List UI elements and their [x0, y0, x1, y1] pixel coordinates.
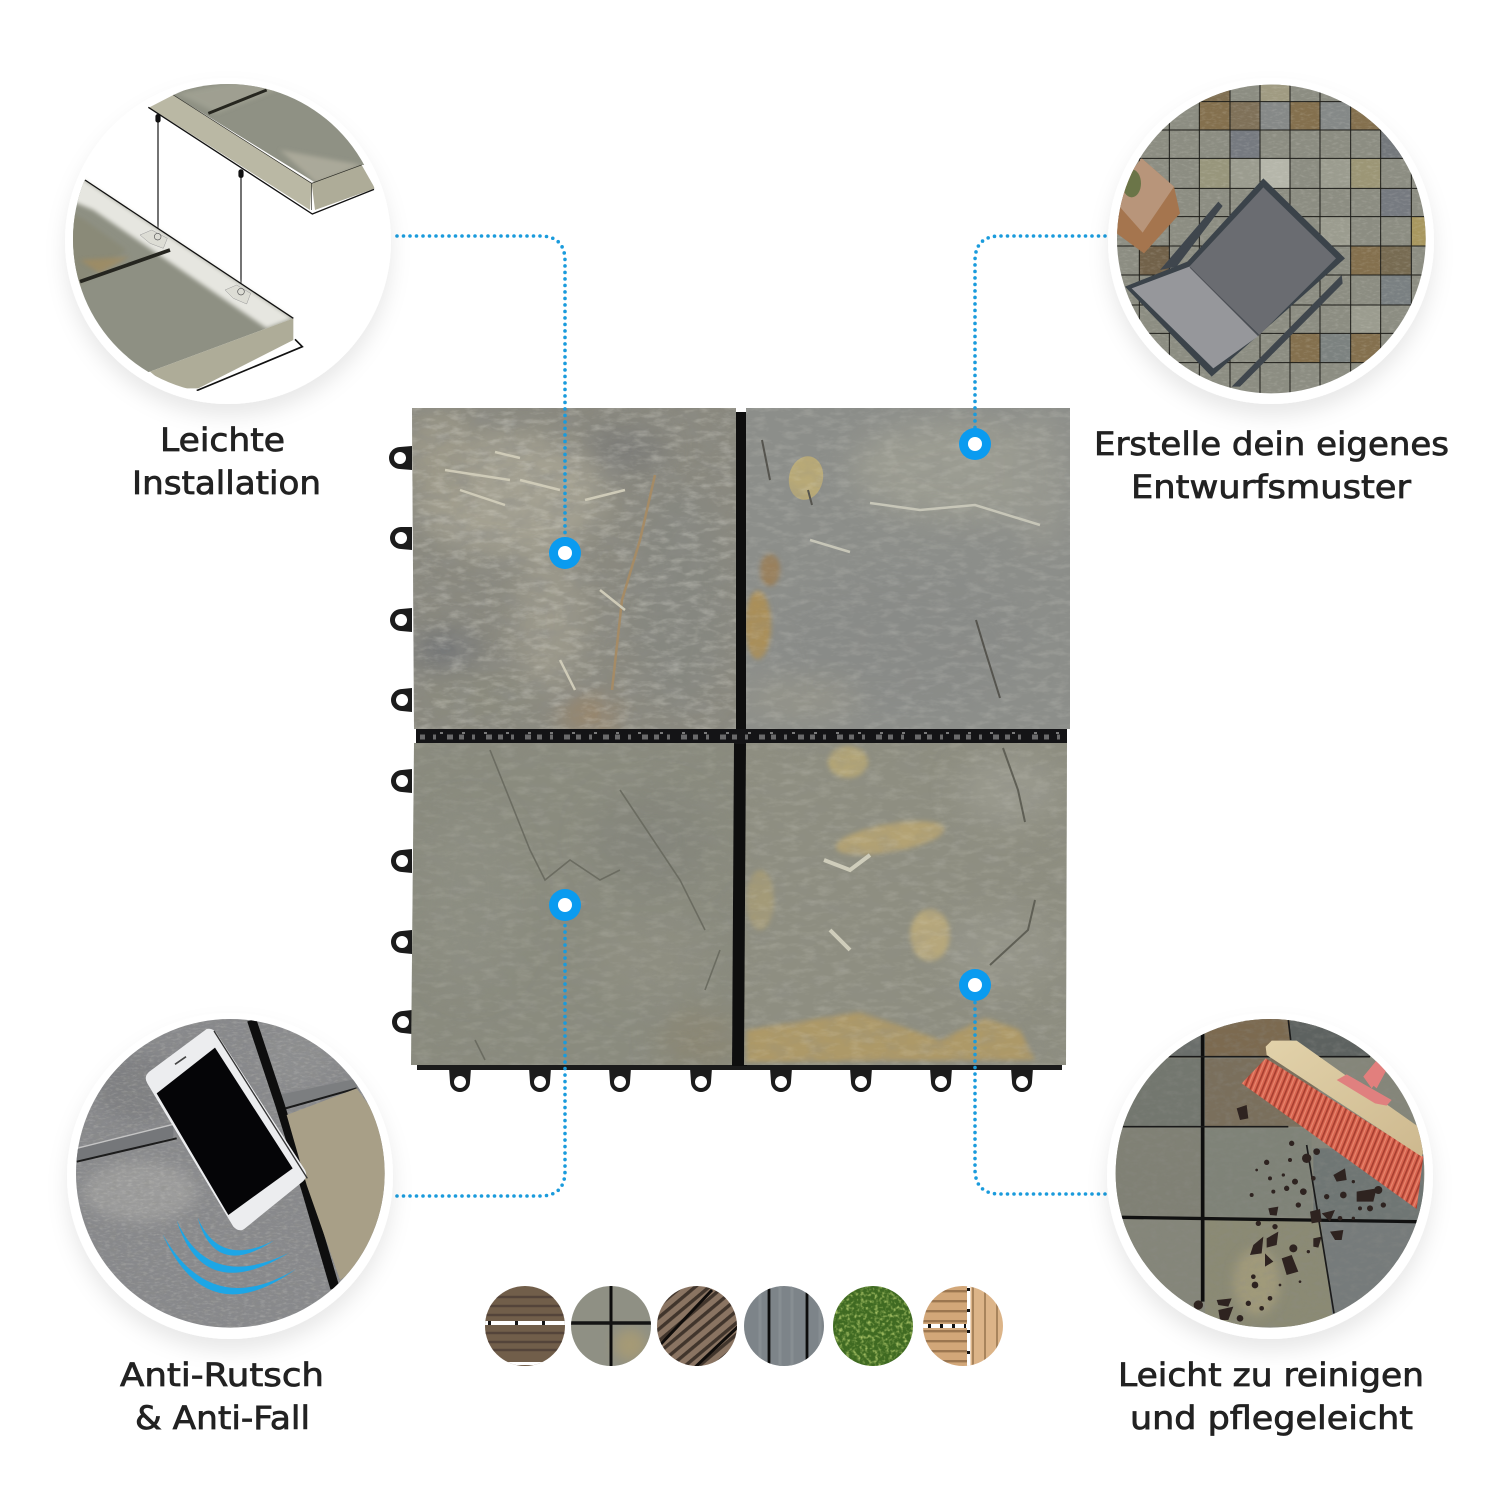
- tile mosaic: [1117, 84, 1426, 394]
- label: Anti-Rutsch & Anti-Fall: [120, 1356, 324, 1437]
- phone: [146, 1029, 307, 1230]
- connector pins: [156, 113, 243, 292]
- marker: installation: [549, 537, 581, 569]
- label: Leichte Installation: Installation: [132, 464, 321, 502]
- label: Leichte Installation: Leichte: [160, 421, 285, 459]
- marker: design pattern: [959, 428, 991, 460]
- connector: easy cleaning: [975, 985, 1105, 1194]
- marker: easy cleaning: [959, 969, 991, 1001]
- interlock clips left side: [389, 446, 412, 1034]
- label: Erstelle dein eigenes Entwurfsmuster: Erstelle dein eigenes: [1094, 425, 1449, 463]
- label: Leicht zu reinigen und pflegeleicht: [1118, 1356, 1424, 1437]
- outdoor chair: [1125, 178, 1345, 387]
- tile top left: [405, 408, 736, 730]
- lower slab: [73, 179, 304, 391]
- tile bottom right: [744, 743, 1068, 1065]
- icon: anti slip waves: [163, 1218, 296, 1294]
- swatch: grey wood: [744, 1286, 824, 1366]
- broom: [1242, 1041, 1430, 1209]
- illustration: exploded tile assembly: [73, 84, 374, 391]
- dirt particles: [1194, 1105, 1386, 1322]
- connector: design pattern: [975, 236, 1105, 444]
- swatch: dark wood: [485, 1286, 565, 1366]
- label: Anti-Rutsch & Anti-Fall: Anti-Rutsch: [120, 1356, 324, 1394]
- panel: custom design pattern: [1094, 70, 1449, 506]
- label: Leicht zu reinigen und pflegeleicht: und pflegeleicht: [1130, 1399, 1413, 1437]
- label: Anti-Rutsch & Anti-Fall: & Anti-Fall: [135, 1399, 310, 1437]
- wooden stool with plant: [1117, 158, 1180, 253]
- label: Erstelle dein eigenes Entwurfsmuster: Entwurfsmuster: [1131, 468, 1412, 506]
- photo: phone on slate tiles: [70, 1015, 393, 1335]
- photo: patio tiles with chair: [1117, 84, 1426, 394]
- tile top right: [740, 408, 1070, 730]
- photo: broom on tiles: [1110, 1015, 1433, 1335]
- plastic base and joints: [416, 412, 1067, 1070]
- label: Leichte Installation: [132, 421, 321, 502]
- label: Leicht zu reinigen und pflegeleicht: Leicht zu reinigen: [1118, 1356, 1424, 1394]
- swatch: brown composite: [657, 1286, 737, 1366]
- panel: easy installation: [53, 63, 393, 502]
- connector: installation: [397, 236, 565, 553]
- product: four slate tile panel: [389, 408, 1070, 1092]
- slate floor: [1110, 1015, 1433, 1335]
- beige tile: [287, 1088, 393, 1280]
- swatches: available tile finishes: [485, 1286, 1005, 1372]
- swatch: slate: [571, 1286, 651, 1366]
- upper slab: [148, 84, 374, 215]
- interlock clips bottom side: [449, 1068, 1033, 1092]
- tile bottom left: [411, 743, 740, 1070]
- connector: anti slip: [397, 905, 565, 1196]
- marker: anti slip: [549, 889, 581, 921]
- slate floor: [70, 1015, 393, 1335]
- panel: easy cleaning: [1107, 1013, 1433, 1437]
- swatch: light wood: [923, 1286, 1005, 1366]
- swatch: artificial grass: [833, 1286, 913, 1366]
- label: Erstelle dein eigenes Entwurfsmuster: [1094, 425, 1449, 506]
- panel: anti slip: [67, 1013, 393, 1437]
